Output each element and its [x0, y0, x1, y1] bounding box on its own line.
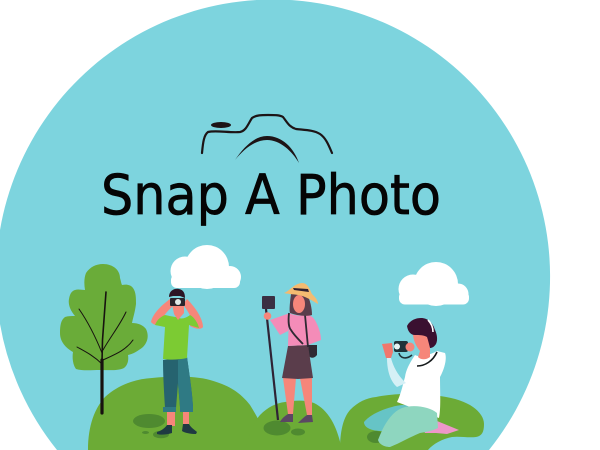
neck strap	[417, 352, 437, 366]
shoes	[280, 414, 313, 423]
trousers	[163, 357, 193, 408]
feet	[421, 421, 459, 434]
camera	[394, 341, 412, 358]
ground shadows	[264, 420, 290, 436]
bag	[308, 345, 317, 358]
hat	[284, 283, 318, 304]
arm	[387, 358, 406, 387]
hair	[407, 318, 437, 348]
legs	[167, 411, 189, 426]
hand	[382, 343, 393, 358]
shorts	[282, 345, 313, 379]
arms	[151, 299, 175, 326]
headband	[428, 320, 433, 332]
sweater	[397, 351, 446, 418]
hair	[290, 294, 312, 316]
back leg	[364, 405, 426, 431]
middle hill	[245, 401, 342, 450]
arm	[270, 313, 290, 335]
tree	[60, 264, 148, 413]
front leg	[378, 406, 438, 447]
shoes	[157, 425, 172, 435]
person: kneeling woman	[364, 318, 459, 447]
camera logo	[202, 115, 332, 163]
person: woman with selfie stick	[262, 283, 321, 436]
cloud: right	[398, 262, 469, 306]
camera	[170, 298, 185, 306]
ground shadows	[133, 414, 165, 428]
shadows	[367, 431, 385, 443]
right hill	[340, 394, 484, 450]
hair	[169, 289, 185, 298]
face	[413, 333, 430, 359]
straps	[289, 313, 308, 347]
legs	[283, 378, 312, 415]
tree trunk and branches	[77, 292, 133, 413]
tree foliage	[60, 264, 148, 370]
selfie stick	[266, 309, 278, 420]
hand on camera	[406, 342, 414, 352]
title: Snap A Photo	[101, 163, 441, 227]
face	[293, 295, 305, 313]
cloud: left	[170, 245, 241, 289]
person: man with camera	[133, 289, 203, 438]
camera on stick	[262, 296, 275, 309]
shirt	[155, 315, 199, 360]
face and neck	[172, 304, 184, 320]
pink top	[288, 313, 321, 346]
left hill	[88, 377, 270, 450]
